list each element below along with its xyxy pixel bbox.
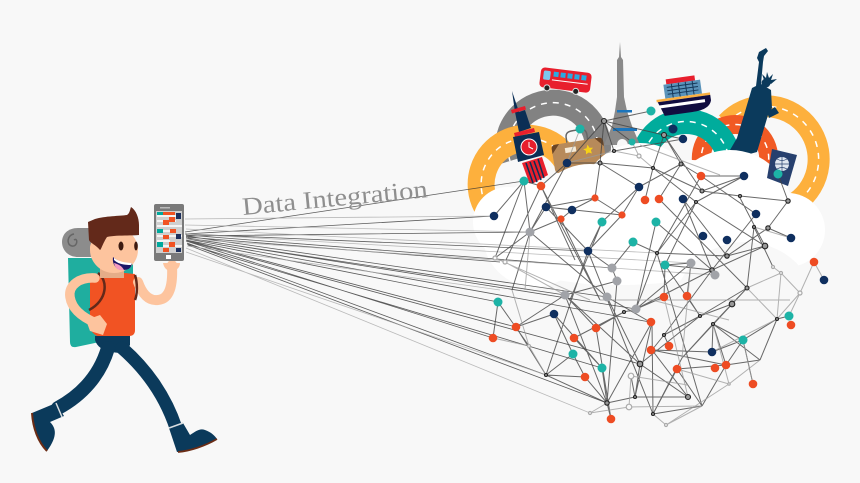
road: yellow right — [727, 106, 819, 202]
shirt — [90, 273, 135, 336]
front shoe — [169, 423, 217, 452]
network: grey nodes — [526, 228, 720, 314]
cloud lower shade — [673, 242, 817, 382]
icon: eiffel tower — [604, 42, 640, 145]
road: orange — [701, 124, 769, 165]
heading: Data Integration: Data Integration — [241, 176, 429, 221]
pants and back leg — [58, 336, 176, 428]
bedroll — [62, 228, 94, 257]
road: grey — [508, 103, 598, 161]
eyes — [118, 242, 124, 250]
left arm and fist — [70, 278, 107, 335]
icon: suitcase — [549, 126, 607, 174]
hand holding phone — [163, 263, 180, 271]
backpack — [68, 258, 133, 347]
hair — [88, 207, 139, 250]
back shoe — [32, 403, 64, 451]
network: small ring nodes — [544, 118, 790, 416]
network: phone signal lines — [185, 181, 715, 413]
network: links — [493, 111, 824, 425]
road arcs behind the cloud — [481, 103, 819, 205]
network: navy nodes — [490, 124, 828, 356]
network: pale ring nodes — [493, 154, 802, 426]
cloud — [473, 143, 825, 287]
icon: passport — [767, 149, 797, 186]
head — [90, 227, 138, 273]
ear — [90, 241, 102, 255]
neck — [100, 264, 124, 278]
network: orange nodes — [489, 172, 818, 423]
phone — [154, 204, 184, 261]
icon: ship — [654, 74, 712, 117]
road: yellow left — [481, 138, 568, 205]
icon: statue of liberty — [730, 48, 779, 158]
mouth — [113, 257, 132, 270]
backpack straps — [89, 273, 137, 310]
road: teal — [642, 122, 730, 165]
icon: bus — [539, 67, 592, 96]
icon: big ben — [511, 91, 548, 185]
right arm — [138, 265, 172, 300]
character: backpacker — [32, 204, 217, 452]
network: teal nodes — [494, 106, 794, 372]
